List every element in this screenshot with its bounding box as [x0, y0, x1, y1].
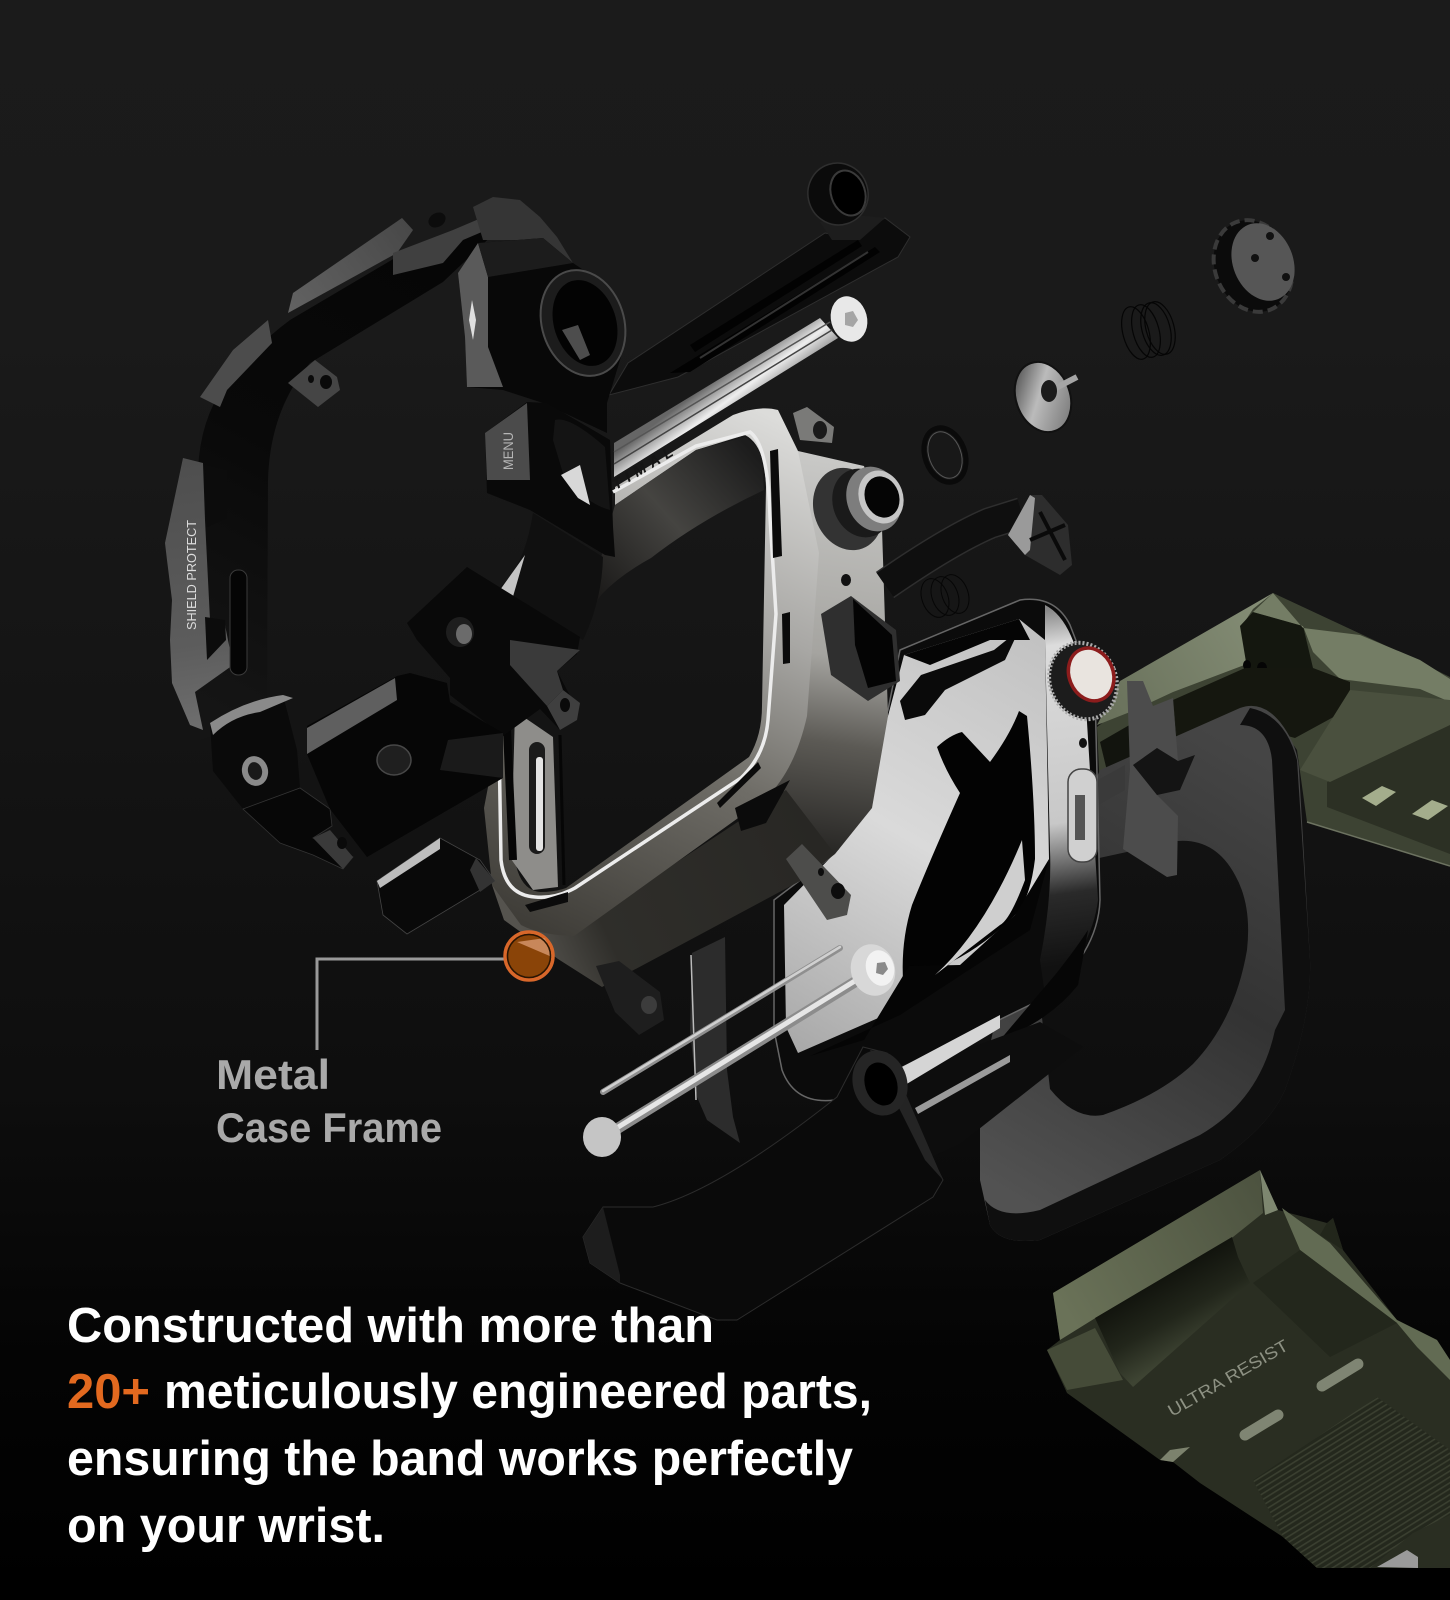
ring washer [917, 422, 973, 488]
callout label: Metal [216, 1051, 330, 1098]
coil spring [1116, 298, 1181, 362]
callout: metal case frame [216, 932, 553, 1151]
lower lug [596, 961, 664, 1035]
shield protect plate [165, 458, 233, 730]
watch [774, 599, 1128, 1101]
right lug [786, 844, 851, 920]
metal case frame [484, 407, 911, 1035]
flap ring [844, 1043, 916, 1123]
case side spring [916, 571, 974, 621]
side wall [770, 451, 888, 854]
menu block [485, 402, 615, 557]
top-left lug [288, 360, 340, 407]
green band upper [1097, 593, 1450, 866]
green band lower [1047, 1170, 1450, 1568]
frame slots [770, 449, 782, 558]
top lug [793, 407, 834, 443]
band buckle glint [1377, 1550, 1418, 1568]
leader line [317, 959, 505, 1050]
digital crown [1038, 632, 1128, 730]
headline text: meticulously engineered parts, [164, 1365, 872, 1419]
long screw [614, 292, 872, 477]
top plates [288, 218, 413, 313]
disc pin [1005, 354, 1081, 440]
callout: metal case frame: Case Frame [216, 1104, 442, 1151]
strap with slot [511, 711, 558, 890]
band arm top [609, 155, 910, 395]
crown guard block [458, 238, 623, 433]
bottom black strip [0, 1568, 1450, 1600]
headline text: on your wrist. [67, 1499, 385, 1553]
upper lower-right block [407, 567, 580, 736]
screen reflections [810, 619, 1049, 1056]
headline text [67, 1299, 872, 1553]
small parts [885, 208, 1306, 585]
headline text: ensuring the band works perfectly [67, 1432, 853, 1486]
pins and screw [583, 939, 901, 1157]
black bumper frame [165, 197, 639, 934]
wide block [307, 673, 503, 857]
inner wall [590, 437, 764, 610]
loose piece [377, 838, 495, 934]
lower right arc [500, 513, 603, 640]
headline text: 20+ [67, 1365, 150, 1419]
textured blade [690, 937, 740, 1143]
shield protect text: SHIELD PROTECT [184, 520, 199, 630]
headline text: Constructed with more than [67, 1299, 714, 1353]
cross knob and arm [885, 513, 1022, 585]
black bottom flap [583, 1015, 1083, 1320]
menu text: MENU [500, 432, 516, 470]
side button [1068, 769, 1097, 862]
band logo text: ULTRA RESIST [1164, 1336, 1292, 1420]
knob [1200, 208, 1306, 324]
left and top arc [198, 225, 500, 740]
left lower block [210, 695, 300, 809]
rubber inner case [980, 681, 1310, 1241]
orange marker [505, 932, 553, 980]
crown port [802, 458, 894, 560]
rear wall [492, 790, 835, 987]
front rim [484, 408, 819, 936]
side slot [230, 570, 247, 675]
frame logo text: TIMAL [609, 444, 676, 493]
button port [821, 596, 900, 701]
